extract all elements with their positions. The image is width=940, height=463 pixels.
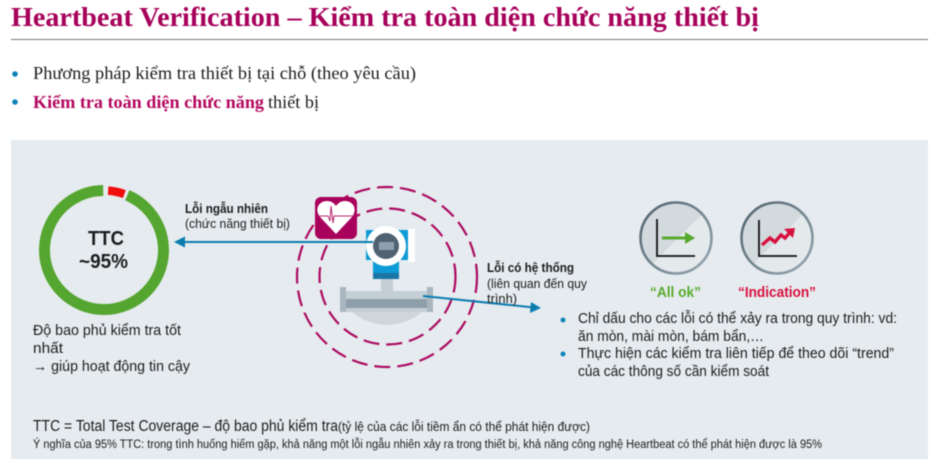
footnote: meaning of 95%: Ý nghĩa của 95% TTC: trong tình huống hiếm gặp, khả năng một lỗi ngẫu nhiên xảy ra trong thiết bị, khả năng công nghệ Heartbeat có thể phát hiện được là 95% xyxy=(33,438,822,451)
right bullet list: Chỉ dấu cho các lỗi có thể xảy ra trong quy trình: vd: xyxy=(578,310,897,327)
label: random failures: (chức năng thiết bị) xyxy=(185,216,290,231)
chart: TTC coverage ring xyxy=(26,172,182,328)
intro bullet list: Phương pháp kiểm tra thiết bị tại chỗ (theo yêu cầu) xyxy=(33,63,416,84)
intro bullet list xyxy=(12,63,416,112)
label: all ok: “All ok” xyxy=(650,284,701,301)
label: systematic failures xyxy=(487,260,587,306)
coverage description: Độ bao phủ kiểm tra tốt xyxy=(33,322,182,339)
icon: flowmeter device xyxy=(340,226,433,325)
icon: heart monitor xyxy=(315,197,357,239)
icon: indication trend xyxy=(742,202,812,274)
label: random failures xyxy=(185,201,290,231)
coverage description: → giúp hoạt động tin cậy xyxy=(33,358,190,375)
coverage description xyxy=(33,322,190,375)
arrow: systematic failures xyxy=(423,296,541,313)
chart: TTC coverage ring: ~95% xyxy=(79,251,128,273)
coverage description: nhất xyxy=(33,340,64,357)
footnote: TTC definition: TTC = Total Test Coverage – độ bao phủ kiểm tra xyxy=(33,418,338,435)
label: systematic failures: (liên quan đến quy xyxy=(487,276,587,291)
right bullet list: của các thông số cần kiểm soát xyxy=(578,363,770,380)
title: Heartbeat Verification – Kiểm tra toàn diện chức năng thiết bị xyxy=(11,2,760,32)
right bullet list xyxy=(560,310,897,380)
label: systematic failures: Lỗi có hệ thống xyxy=(487,260,574,275)
label: indication: “Indication” xyxy=(738,284,816,301)
intro bullet list: thiết bị xyxy=(268,92,319,112)
panel: background xyxy=(11,140,928,459)
right bullet list: Thực hiện các kiểm tra liên tiếp để theo dõi “trend” xyxy=(578,345,894,362)
label: random failures: Lỗi ngẫu nhiên xyxy=(185,201,268,216)
footnote: TTC definition: (tỷ lệ của các lỗi tiềm ẩn có thể phát hiện được) xyxy=(338,419,590,434)
label: systematic failures: trình) xyxy=(487,291,517,306)
right bullet list: ăn mòn, mài mòn, bám bẩn,… xyxy=(578,328,764,345)
footnote: TTC definition xyxy=(33,418,590,435)
dashed signal rings xyxy=(297,187,477,367)
chart: TTC coverage ring: TTC xyxy=(88,228,124,250)
icon: all ok trend xyxy=(640,202,712,274)
intro bullet list: Kiểm tra toàn diện chức năng xyxy=(33,92,264,112)
arrow: random failures xyxy=(174,236,373,248)
